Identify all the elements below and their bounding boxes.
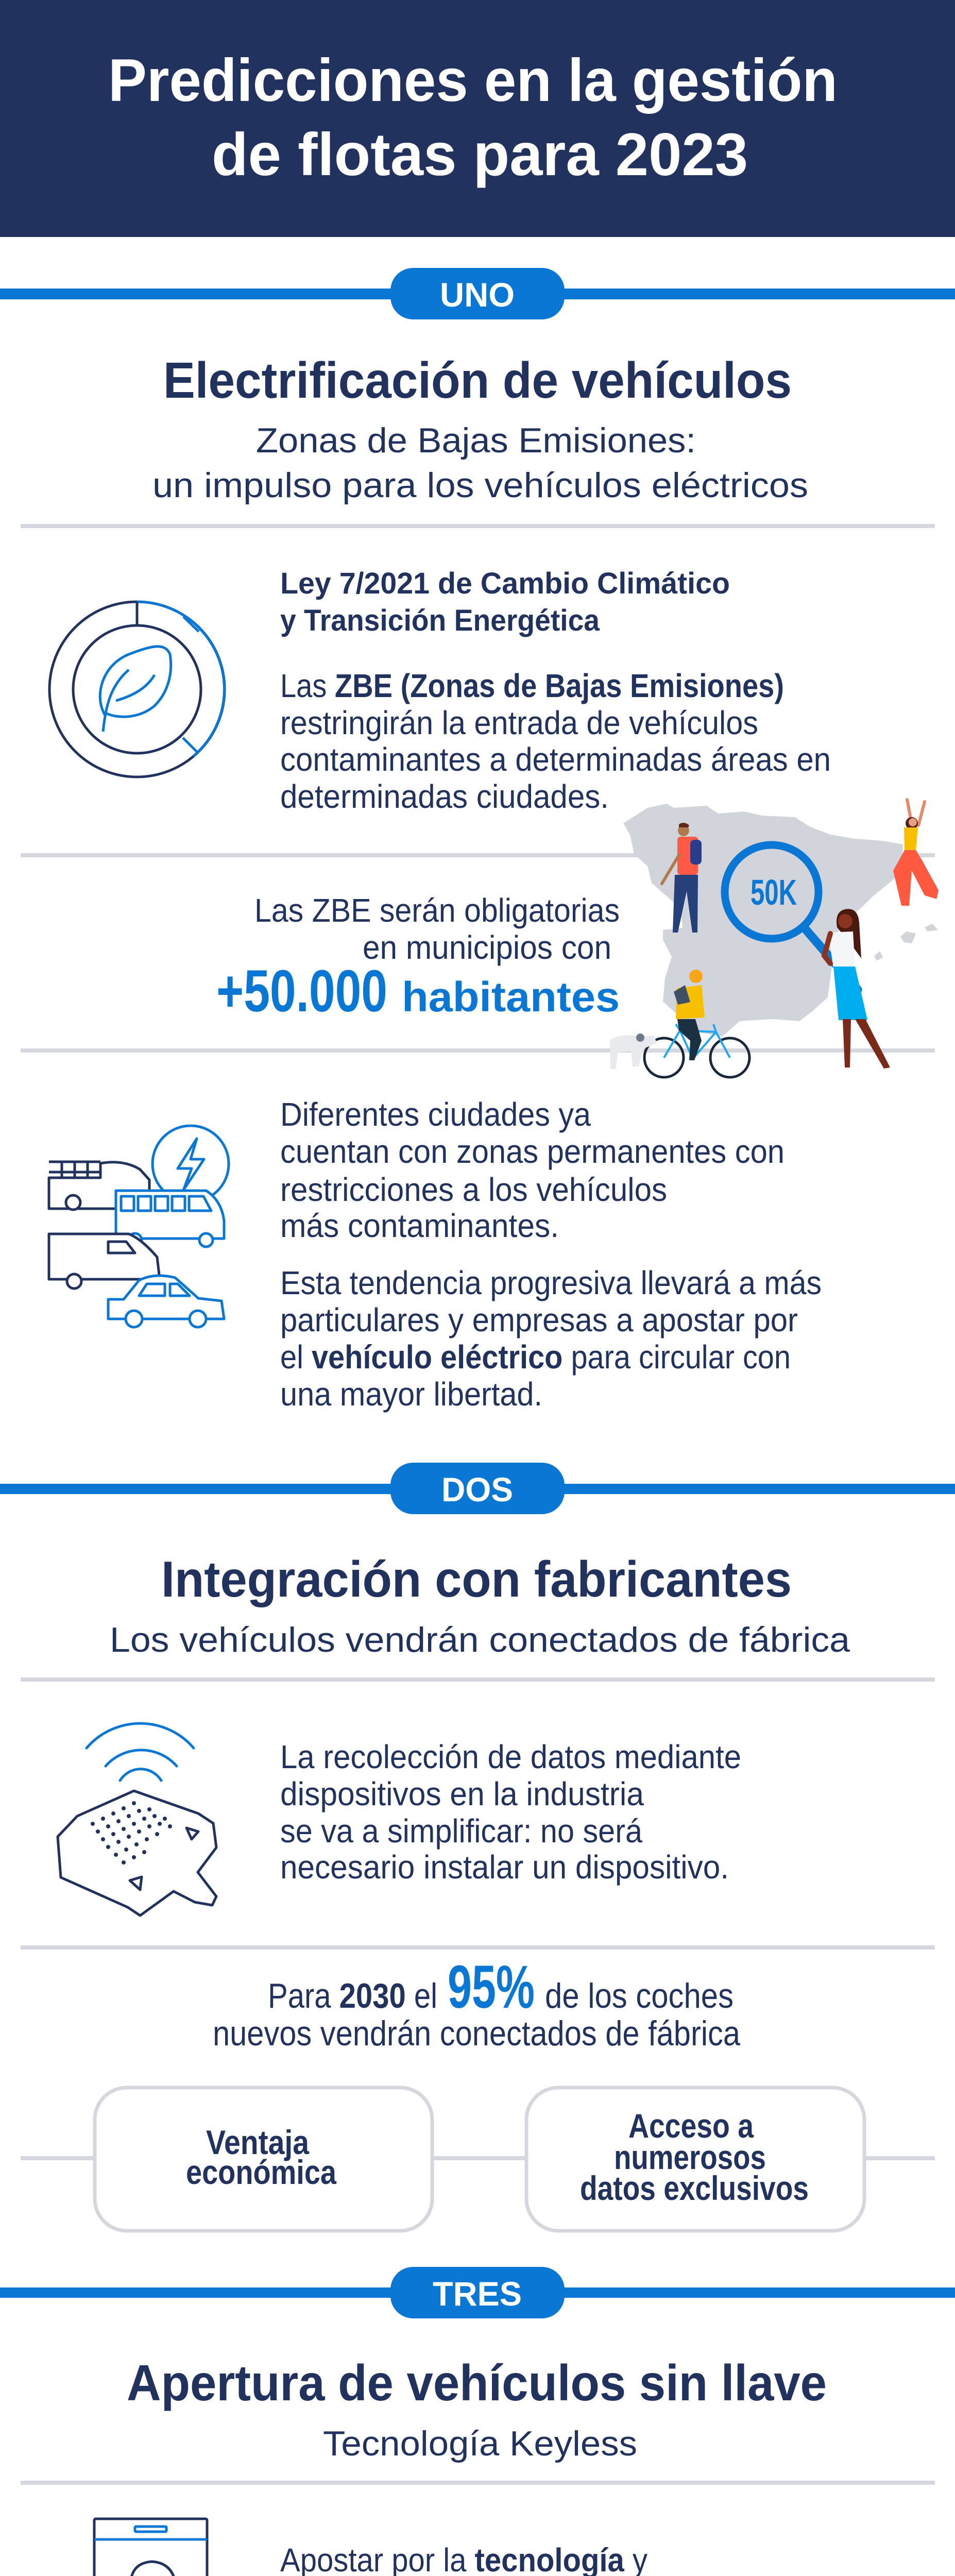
heading: Apertura de vehículos sin llave — [127, 2354, 827, 2463]
text: Ley 7/2021: Ley 7/2021 de Cambio Climático — [280, 567, 730, 600]
heading: Apertura de vehículos sin llave: Apertura de vehículos sin llave — [127, 2354, 827, 2411]
text: Diferentes ciudades: Esta tendencia progresiva llevará a más — [280, 1264, 822, 1301]
box: Ventaja económica: Ventaja — [206, 2123, 310, 2161]
text: Ley 7/2021: determinadas ciudades. — [280, 778, 609, 815]
magnifier 50K — [725, 845, 858, 990]
section badge: DOS: DOS — [441, 1470, 513, 1509]
person: cyclist with dog — [610, 970, 749, 1077]
text: Ley 7/2021: contaminantes a determinadas áreas en — [280, 741, 831, 778]
text: Diferentes ciudades: cuentan con zonas permanentes con — [280, 1133, 785, 1170]
section badge: UNO — [0, 268, 955, 319]
text: recolección de datos: dispositivos en la industria — [280, 1775, 644, 1812]
title — [108, 46, 838, 188]
text: Diferentes ciudades — [280, 1096, 822, 1413]
text: Diferentes ciudades: particulares y empresas a apostar por — [280, 1301, 798, 1338]
text: Ley 7/2021 — [280, 567, 831, 815]
section badge: TRES: TRES — [433, 2275, 522, 2313]
stat: 95%: Para 2030 el — [268, 1976, 437, 2015]
heading: Integración con fabricantes: Los vehículos vendrán conectados de fábrica — [110, 1620, 850, 1659]
text: recolección de datos: necesario instalar un dispositivo. — [280, 1849, 729, 1886]
illustration: map of Spain with people and magnifier — [610, 800, 939, 1077]
box: Ventaja económica — [95, 2088, 432, 2231]
heading: Integración con fabricantes — [110, 1551, 850, 1659]
text: Diferentes ciudades: más contaminantes. — [280, 1207, 559, 1244]
stat: 95%: nuevos vendrán conectados de fábrica — [213, 2014, 740, 2053]
text: Diferentes ciudades: el vehículo eléctrico para circular con — [280, 1338, 791, 1376]
text: Ley 7/2021: Las ZBE (Zonas de Bajas Emisiones) — [280, 667, 784, 704]
icon: vehicles with lightning — [49, 1126, 229, 1327]
person: woman with magnifier — [824, 909, 890, 1069]
heading: Apertura de vehículos sin llave: Tecnología Keyless — [323, 2424, 637, 2463]
text: ZBE obligatorias +50.000 habitantes — [216, 892, 620, 1024]
text: Diferentes ciudades: restricciones a los vehículos — [280, 1171, 667, 1208]
heading: Electrificación de vehículos: Electrificación de vehículos — [163, 352, 792, 409]
heading: Integración con fabricantes: Integración con fabricantes — [161, 1551, 792, 1607]
person: jumping woman — [893, 800, 939, 906]
person: backpacker — [662, 823, 702, 933]
title: Predicciones en la gestión — [108, 46, 838, 114]
box: Acceso a numerosos datos exclusivos: Acceso a — [628, 2107, 754, 2145]
box: Acceso a numerosos datos exclusivos: datos exclusivos — [580, 2169, 809, 2207]
box: Ventaja económica: económica — [186, 2153, 337, 2191]
text: recolección de datos: La recolección de datos mediante — [280, 1738, 741, 1775]
text: Ley 7/2021: restringirán la entrada de vehículos — [280, 704, 758, 741]
title: de flotas para 2023 — [212, 121, 748, 188]
stat: 95%: 95% — [448, 1953, 535, 2021]
text: Diferentes ciudades: Diferentes ciudades ya — [280, 1096, 591, 1133]
text: Diferentes ciudades: una mayor libertad. — [280, 1376, 542, 1413]
stat: 95%: de los coches — [545, 1976, 734, 2015]
text: ZBE obligatorias +50.000 habitantes: +50.000 — [216, 958, 387, 1024]
text: ZBE obligatorias +50.000 habitantes: habitantes — [402, 974, 620, 1021]
text: ZBE obligatorias +50.000 habitantes: Las ZBE serán obligatorias — [254, 892, 620, 929]
box: Acceso a numerosos datos exclusivos: numerosos — [614, 2138, 766, 2176]
magnifier 50K: 50K — [751, 872, 797, 912]
heading: Electrificación de vehículos — [152, 352, 808, 505]
stat: 95% — [213, 1953, 740, 2053]
box: Acceso a numerosos datos exclusivos — [526, 2088, 864, 2231]
text: recolección de datos — [280, 1738, 741, 1886]
heading: Electrificación de vehículos: Zonas de Bajas Emisiones: — [256, 421, 696, 460]
icon: leaf in circle — [49, 602, 225, 777]
section badge: UNO: UNO — [440, 276, 515, 314]
section badge: DOS — [0, 1463, 955, 1514]
text: ZBE obligatorias +50.000 habitantes: en municipios con — [363, 929, 611, 966]
heading: Electrificación de vehículos: un impulso para los vehículos eléctricos — [152, 466, 808, 505]
text: recolección de datos: se va a simplificar: no será — [280, 1812, 642, 1850]
header banner — [0, 0, 955, 237]
text: Ley 7/2021: y Transición Energética — [280, 604, 600, 637]
section badge: TRES — [0, 2267, 955, 2318]
icon: telematics device with signal — [58, 1723, 216, 1916]
icon: phone with open lock — [94, 2519, 207, 2576]
